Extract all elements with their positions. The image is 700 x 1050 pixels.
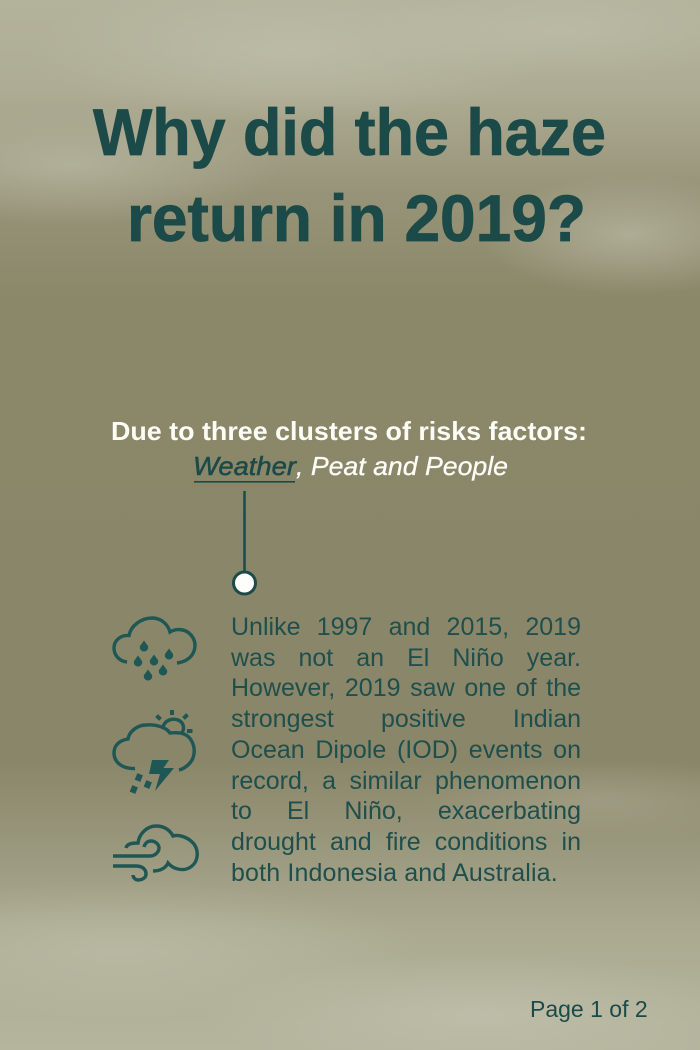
body text: However, 2019 saw one of the: [231, 674, 581, 702]
body text: [231, 613, 581, 887]
body text: both Indonesia and Australia.: [231, 859, 558, 887]
body text: Unlike 1997 and 2015, 2019: [231, 613, 581, 641]
body text: was not an El Niño year.: [231, 644, 581, 672]
icon: storm cloud with sun: [112, 710, 196, 794]
body text: to El Niño, exacerbating: [231, 797, 581, 825]
subtitle: three clusters of risk factors: [111, 416, 587, 483]
subtitle: three clusters of risk factors: Weather: [193, 451, 297, 481]
body text: record, a similar phenomenon: [231, 766, 581, 794]
body text: drought and fire conditions in: [231, 828, 581, 856]
page number: Page 1 of 2: [530, 996, 648, 1022]
body text: strongest positive Indian: [231, 705, 581, 733]
connector line with circle marker: [232, 491, 257, 596]
title: return in 2019?: [127, 181, 586, 255]
icon: rain cloud: [112, 616, 197, 680]
title: [92, 95, 606, 255]
subtitle: three clusters of risk factors: , Peat and People: [296, 451, 508, 481]
subtitle: three clusters of risk factors: Due to three clusters of risks factors:: [111, 416, 587, 446]
icon: wind cloud: [113, 824, 199, 882]
body text: Ocean Dipole (IOD) events on: [231, 736, 581, 764]
title: Why did the haze: [93, 95, 606, 169]
